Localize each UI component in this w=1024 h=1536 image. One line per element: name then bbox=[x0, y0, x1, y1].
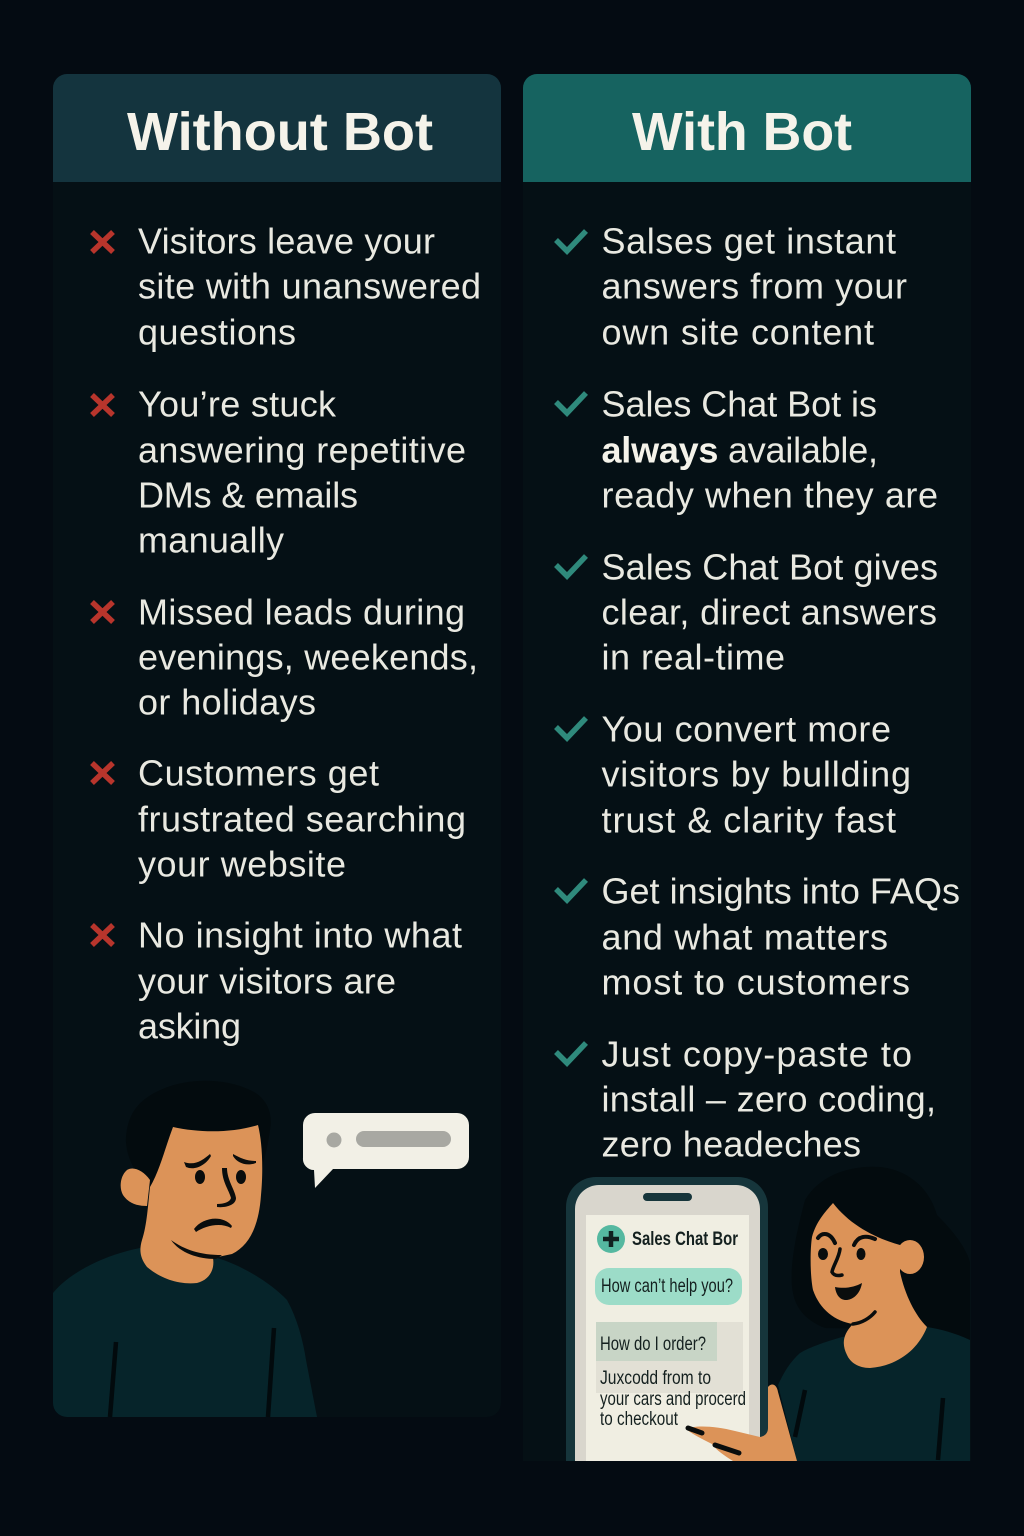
speech bubble: empty message bbox=[303, 1113, 469, 1188]
phone with chat bbox=[566, 1177, 797, 1461]
item: no insight: No insight into what bbox=[138, 914, 462, 956]
chat reply text bbox=[600, 1368, 746, 1430]
chat logo and title: Sales Chat Bor bbox=[632, 1229, 738, 1250]
item: unanswered questions: Visitors leave your bbox=[138, 220, 435, 262]
item: always available: Sales Chat Bot is bbox=[602, 384, 877, 424]
heading: with bot: With Bot bbox=[632, 102, 852, 162]
item: instant answers: answers from your bbox=[602, 266, 907, 306]
item: instant answers bbox=[556, 220, 907, 352]
item: insights: and what matters bbox=[602, 916, 888, 958]
item: always available: ready when they are bbox=[602, 474, 938, 516]
item: always available bbox=[556, 384, 938, 516]
chat bubble: bot greeting: How can’t help you? bbox=[601, 1276, 733, 1297]
item: frustrated customers: your website bbox=[138, 844, 346, 884]
man ear bbox=[121, 1168, 150, 1206]
panel: with bot bbox=[523, 74, 971, 1461]
item: repetitive messages bbox=[92, 384, 466, 560]
item: convert more: visitors by bullding bbox=[602, 754, 911, 794]
chat bubble: bot greeting bbox=[595, 1268, 742, 1305]
item: insights: Get insights into FAQs bbox=[602, 870, 960, 912]
item: unanswered questions: site with unanswered bbox=[138, 266, 481, 306]
illustration: frustrated man bbox=[53, 1081, 317, 1417]
phone frame bbox=[566, 1177, 768, 1461]
item: unanswered questions: questions bbox=[138, 312, 296, 352]
item: no insight: asking bbox=[138, 1006, 241, 1046]
item: missed leads: Missed leads during bbox=[138, 592, 465, 632]
item: clear answers: in real-time bbox=[602, 636, 785, 678]
item: convert more: You convert more bbox=[602, 708, 891, 750]
woman face and neck bbox=[811, 1203, 927, 1368]
woman facial features bbox=[818, 1234, 875, 1324]
woman hair bbox=[792, 1167, 970, 1340]
item: instant answers: Salses get instant bbox=[602, 220, 896, 262]
item: frustrated customers bbox=[92, 752, 466, 884]
heading: without bot: Without Bot bbox=[127, 102, 433, 162]
item: no insight: your visitors are bbox=[138, 960, 396, 1002]
hand pointing at phone bbox=[686, 1385, 797, 1461]
chat reply text: your cars and procerd bbox=[600, 1389, 746, 1410]
man face and neck bbox=[140, 1125, 262, 1283]
item: repetitive messages: DMs & emails bbox=[138, 474, 358, 516]
illustration: smiling woman bbox=[778, 1167, 970, 1461]
panel: without bot bbox=[53, 74, 501, 1417]
chat bubble: user question bbox=[596, 1322, 743, 1393]
phone screen bbox=[575, 1185, 760, 1461]
item: repetitive messages: You’re stuck bbox=[138, 384, 337, 424]
heading: with bot bbox=[523, 74, 971, 182]
item: missed leads: or holidays bbox=[138, 682, 316, 722]
item: frustrated customers: Customers get bbox=[138, 752, 379, 794]
item: repetitive messages: manually bbox=[138, 520, 284, 560]
item: missed leads bbox=[92, 592, 478, 722]
woman ear bbox=[896, 1240, 924, 1274]
chat logo and title bbox=[597, 1225, 738, 1253]
item: convert more bbox=[556, 708, 911, 840]
item: repetitive messages: answering repetitive bbox=[138, 430, 466, 470]
item: clear answers: Sales Chat Bot gives bbox=[602, 546, 938, 588]
item: unanswered questions bbox=[92, 220, 481, 352]
heading: without bot bbox=[53, 74, 501, 182]
item: insights bbox=[556, 870, 960, 1002]
item: no insight bbox=[92, 914, 462, 1046]
item: convert more: trust & clarity fast bbox=[602, 800, 896, 840]
chat reply text: Juxcodd from to bbox=[600, 1368, 711, 1389]
woman shirt bbox=[778, 1327, 970, 1461]
man facial features bbox=[171, 1154, 256, 1259]
man hair bbox=[126, 1081, 271, 1187]
item: always available: always available, bbox=[602, 430, 878, 470]
chat reply text: to checkout bbox=[600, 1409, 679, 1430]
item: instant answers: own site content bbox=[602, 312, 874, 352]
item: insights: most to customers bbox=[602, 962, 910, 1002]
item: clear answers: clear, direct answers bbox=[602, 592, 937, 632]
man shirt bbox=[53, 1248, 317, 1417]
item: clear answers bbox=[556, 546, 938, 678]
item: missed leads: evenings, weekends, bbox=[138, 636, 478, 678]
chat bubble: user question: How do I order? bbox=[600, 1334, 706, 1355]
item: easy install: Just copy-paste to bbox=[602, 1034, 912, 1074]
item: easy install: install – zero coding, bbox=[602, 1078, 936, 1120]
item: easy install: zero headeches bbox=[602, 1124, 861, 1164]
item: frustrated customers: frustrated searching bbox=[138, 798, 466, 840]
item: easy install bbox=[556, 1034, 936, 1164]
